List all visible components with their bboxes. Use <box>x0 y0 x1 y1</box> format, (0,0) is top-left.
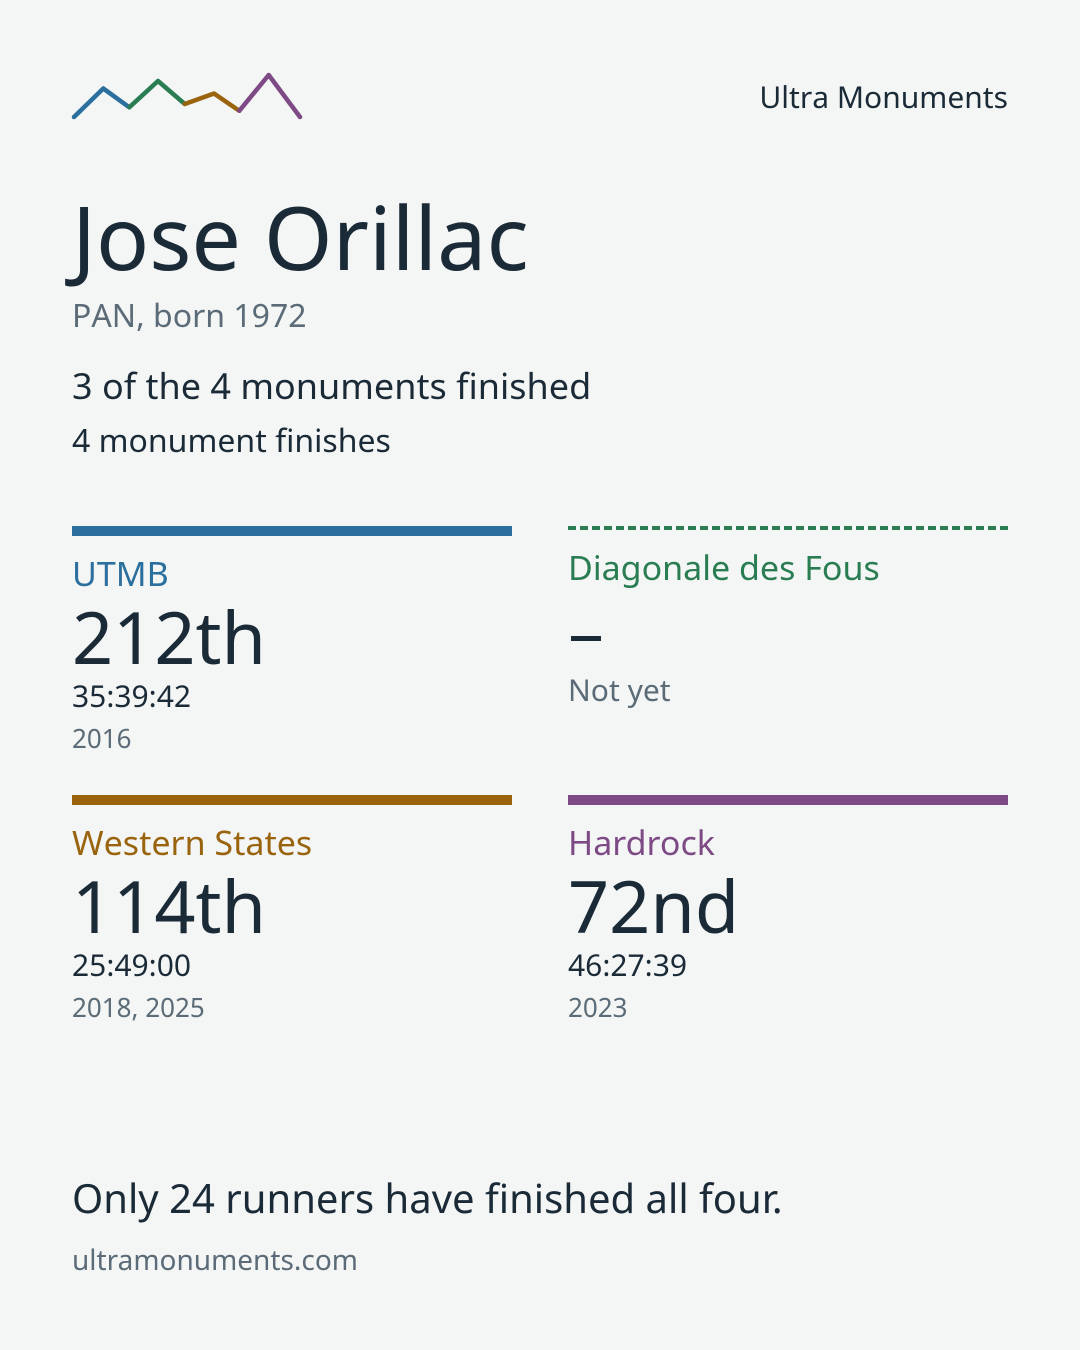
panel: UTMB: 212th <box>72 588 266 686</box>
title: runner name: Jose Orillac <box>72 176 529 296</box>
panel: Hardrock: Hardrock <box>568 819 715 865</box>
panel: Hardrock: 2023 <box>568 989 628 1025</box>
summary: monument finishes: 4 monument finishes <box>72 419 391 462</box>
footer statement: Only 24 runners have finished all four. <box>72 1170 783 1225</box>
panel: Hardrock: 46:27:39 <box>568 944 687 985</box>
panel: Western States: 114th <box>72 857 266 955</box>
footer website: ultramonuments.com <box>72 1241 358 1279</box>
panel: Hardrock <box>568 795 1008 1025</box>
panel: Diagonale des Fous <box>568 526 1008 710</box>
runner nationality and birth year: PAN, born 1972 <box>72 294 307 337</box>
brand name: Ultra Monuments <box>759 76 1008 117</box>
panel: UTMB: 2016 <box>72 720 132 756</box>
panel: UTMB: UTMB <box>72 550 169 596</box>
panel: Western States: Western States <box>72 819 312 865</box>
panel: UTMB: 35:39:42 <box>72 675 191 716</box>
panel: Diagonale des Fous: Diagonale des Fous <box>568 544 880 590</box>
panel: Western States: 25:49:00 <box>72 944 191 985</box>
panel: UTMB <box>72 526 512 756</box>
panel: Western States <box>72 795 512 1025</box>
panel: Hardrock: 72nd <box>568 857 739 955</box>
panel: Diagonale des Fous: Not yet <box>568 669 671 710</box>
panel: Western States: 2018, 2025 <box>72 989 205 1025</box>
summary: monuments finished: 3 of the 4 monuments finished <box>72 361 591 410</box>
icon: mountain ridge logo <box>72 72 302 120</box>
